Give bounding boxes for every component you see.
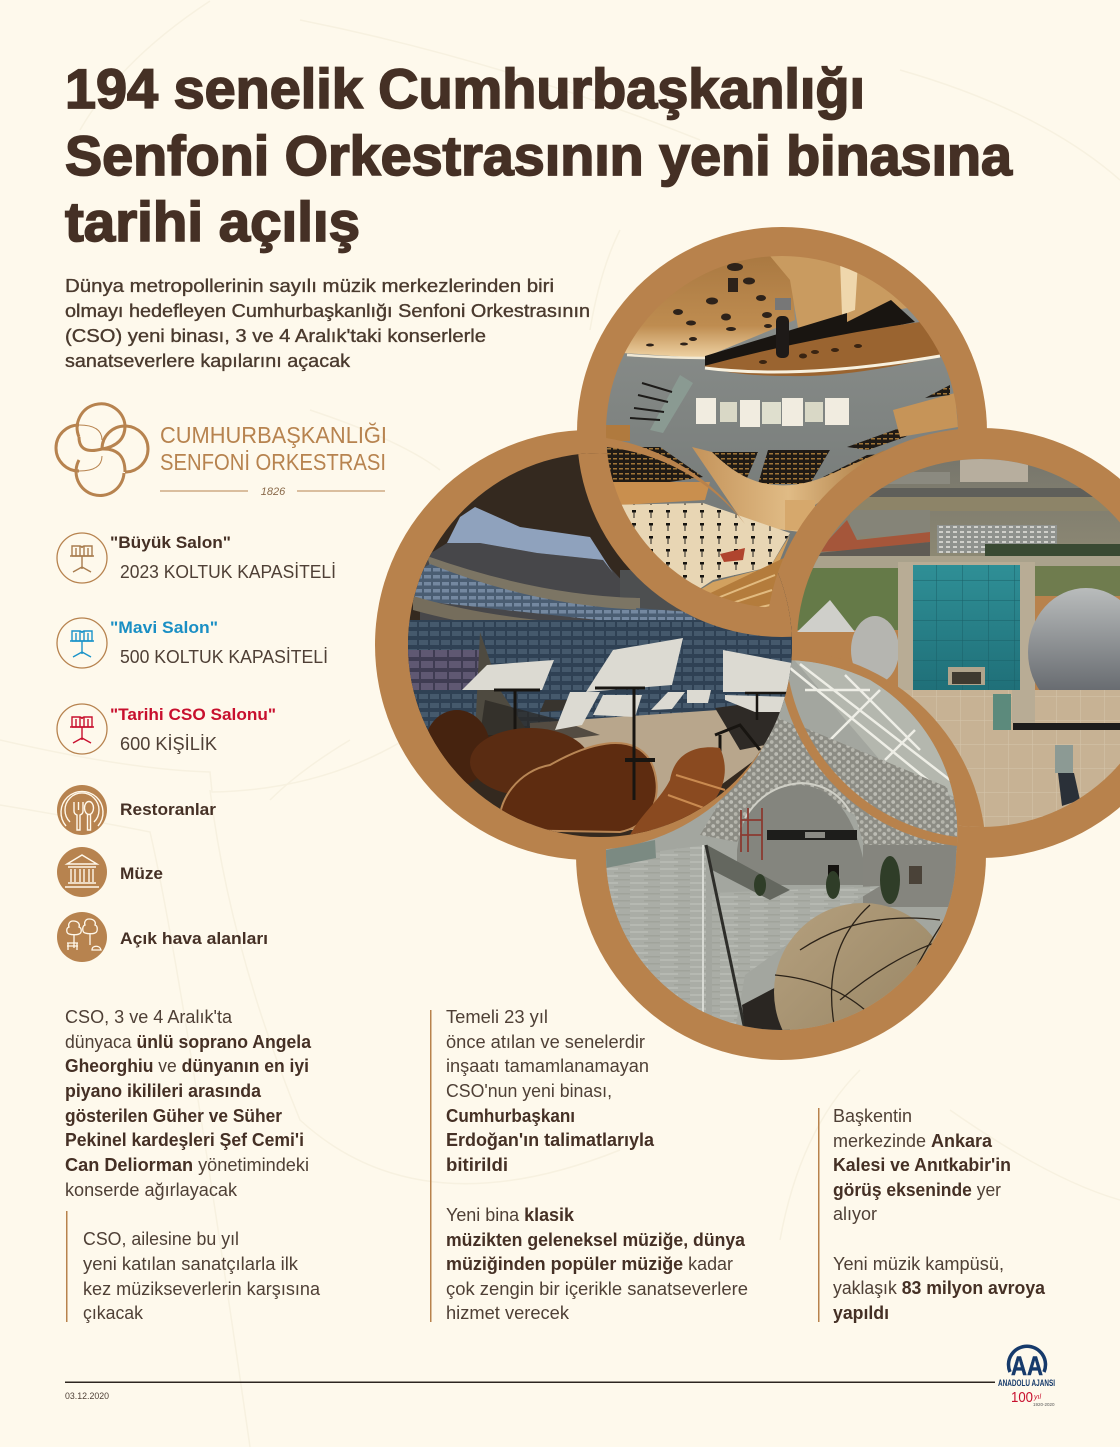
title: 194 senelik Cumhurbaşkanlığı bbox=[65, 57, 865, 120]
feature: Açık hava alanları bbox=[57, 912, 268, 962]
text block: programme: hizmet verecek bbox=[446, 1303, 570, 1323]
icon: trees and bench bbox=[57, 912, 107, 962]
photo: atrium with dome and honeycomb wall bbox=[606, 660, 958, 1030]
text block: programme: çok zengin bir içerikle sanatseverlere bbox=[446, 1279, 748, 1299]
text block: construction history: Cumhurbaşkanı bbox=[446, 1106, 575, 1126]
photo: orchestra stage with double basses bbox=[408, 453, 792, 837]
100th anniversary mark: 100 bbox=[1011, 1389, 1033, 1406]
label: "Mavi Salon" bbox=[110, 618, 218, 637]
capacity: 2023 KOLTUK KAPASİTELİ bbox=[120, 562, 336, 582]
logo wordmark: SENFONİ ORKESTRASI bbox=[160, 449, 386, 475]
text block: construction history bbox=[446, 1007, 655, 1175]
intro paragraph: olmayı hedefleyen Cumhurbaşkanlığı Senfoni Orkestrasının bbox=[65, 301, 590, 321]
text block: concert guests: dünyaca ünlü soprano Angela bbox=[65, 1032, 312, 1052]
text block: cost: yapıldı bbox=[833, 1303, 889, 1323]
brown ring discs bbox=[375, 227, 1120, 1060]
panel: interlocking circular photo collage bbox=[375, 227, 1120, 1081]
text column 2 bbox=[430, 1007, 748, 1323]
text block: concert guests: konserde ağırlayacak bbox=[65, 1180, 238, 1200]
text block: location: merkezinde Ankara bbox=[833, 1131, 993, 1151]
text block: cost: Yeni müzik kampüsü, bbox=[833, 1254, 1004, 1274]
100th anniversary mark: yıl bbox=[1033, 1394, 1041, 1401]
icon: plate and cutlery bbox=[57, 785, 107, 835]
label: "Büyük Salon" bbox=[110, 533, 231, 552]
text block: construction history: inşaatı tamamlanamayan bbox=[446, 1056, 649, 1076]
icon: music stand bbox=[57, 533, 107, 583]
feature: Restoranlar bbox=[57, 785, 216, 835]
100th anniversary mark: 1920-2020 bbox=[1033, 1402, 1055, 1407]
feature: Mavi Salon bbox=[57, 618, 328, 668]
logo wordmark: CUMHURBAŞKANLIĞI bbox=[160, 422, 387, 448]
text column 3 bbox=[818, 1106, 1046, 1323]
title: Senfoni Orkestrasının yeni binasına bbox=[65, 124, 1013, 187]
intro paragraph: sanatseverlere kapılarını açacak bbox=[65, 351, 351, 371]
text block: programme: müzikten geleneksel müziğe, dünya bbox=[446, 1230, 746, 1250]
logo arc and letters: AA bbox=[1011, 1351, 1043, 1381]
decorative ring crescent over the hall photo bbox=[606, 438, 745, 524]
feature: Büyük Salon bbox=[57, 533, 336, 583]
logo mark: four interlaced rings bbox=[56, 404, 148, 496]
text block: construction history: bitirildi bbox=[446, 1155, 508, 1175]
text block: concert guests bbox=[65, 1007, 312, 1200]
label: Açık hava alanları bbox=[120, 929, 268, 948]
logo founding year: 1826 bbox=[261, 486, 286, 498]
capacity: 600 KİŞİLİK bbox=[120, 734, 217, 754]
text block: concert guests: piyano ikilileri arasında bbox=[65, 1081, 262, 1101]
footer rule bbox=[65, 1382, 995, 1383]
text block: location: Başkentin bbox=[833, 1106, 912, 1126]
label: Restoranlar bbox=[120, 800, 216, 819]
label: Müze bbox=[120, 864, 163, 883]
text block: construction history: Temeli 23 yıl bbox=[446, 1007, 548, 1027]
title: tarihi açılış bbox=[65, 190, 360, 253]
intro paragraph bbox=[65, 276, 590, 371]
text block: construction history: CSO'nun yeni binası, bbox=[446, 1081, 612, 1101]
text column 1 bbox=[65, 1007, 321, 1323]
text block: construction history: önce atılan ve senelerdir bbox=[446, 1032, 645, 1052]
text block: new artists: yeni katılan sanatçılarla ilk bbox=[83, 1254, 299, 1274]
feature: Tarihi CSO Salonu bbox=[57, 704, 276, 754]
feature: Müze bbox=[57, 847, 163, 897]
text block: concert guests: Gheorghiu ve dünyanın en iyi bbox=[65, 1056, 309, 1076]
capacity: 500 KOLTUK KAPASİTELİ bbox=[120, 647, 328, 667]
text block: location: alıyor bbox=[833, 1204, 877, 1224]
intro paragraph: Dünya metropollerinin sayılı müzik merkezlerinden biri bbox=[65, 276, 554, 296]
text block: location bbox=[833, 1106, 1011, 1224]
icon: red music stand bbox=[57, 704, 107, 754]
text block: cost: yaklaşık 83 milyon avroya bbox=[833, 1278, 1046, 1298]
logo: Cumhurbaşkanlığı Senfoni Orkestrası bbox=[56, 404, 387, 498]
icon: blue music stand bbox=[57, 618, 107, 668]
text block: new artists: çıkacak bbox=[83, 1303, 144, 1323]
title bbox=[65, 57, 1013, 253]
text block: programme: müziğinden popüler müziğe kadar bbox=[446, 1254, 733, 1274]
text block: concert guests: Can Deliorman yönetimindeki bbox=[65, 1155, 309, 1175]
photo: aerial view of the building bbox=[797, 459, 1120, 827]
label: "Tarihi CSO Salonu" bbox=[110, 705, 276, 724]
text block: programme bbox=[446, 1205, 748, 1323]
text block: construction history: Erdoğan'ın talimatlarıyla bbox=[446, 1130, 655, 1150]
text block: concert guests: CSO, 3 ve 4 Aralık'ta bbox=[65, 1007, 233, 1027]
Anadolu Ajansı logo bbox=[998, 1346, 1055, 1407]
text block: location: görüş ekseninde yer bbox=[833, 1180, 1001, 1200]
text block: new artists bbox=[66, 1211, 321, 1323]
photo: concert hall interior bbox=[606, 256, 958, 608]
text block: programme: Yeni bina klasik bbox=[446, 1205, 575, 1225]
date: 03.12.2020 bbox=[65, 1391, 109, 1402]
text block: cost bbox=[833, 1254, 1046, 1323]
text block: location: Kalesi ve Anıtkabir'in bbox=[833, 1155, 1011, 1175]
100th anniversary mark bbox=[1011, 1389, 1055, 1407]
text block: new artists: CSO, ailesine bu yıl bbox=[83, 1229, 239, 1249]
intro paragraph: (CSO) yeni binası, 3 ve 4 Aralık'taki konserlerle bbox=[65, 326, 486, 346]
logo wordmark bbox=[160, 422, 387, 475]
icon: museum building bbox=[57, 847, 107, 897]
text block: concert guests: gösterilen Güher ve Süher bbox=[65, 1106, 282, 1126]
agency name: ANADOLU AJANSI bbox=[998, 1378, 1055, 1389]
text block: new artists: kez müzikseverlerin karşısına bbox=[83, 1279, 321, 1299]
text block: concert guests: Pekinel kardeşleri Şef Cemi'i bbox=[65, 1130, 304, 1150]
